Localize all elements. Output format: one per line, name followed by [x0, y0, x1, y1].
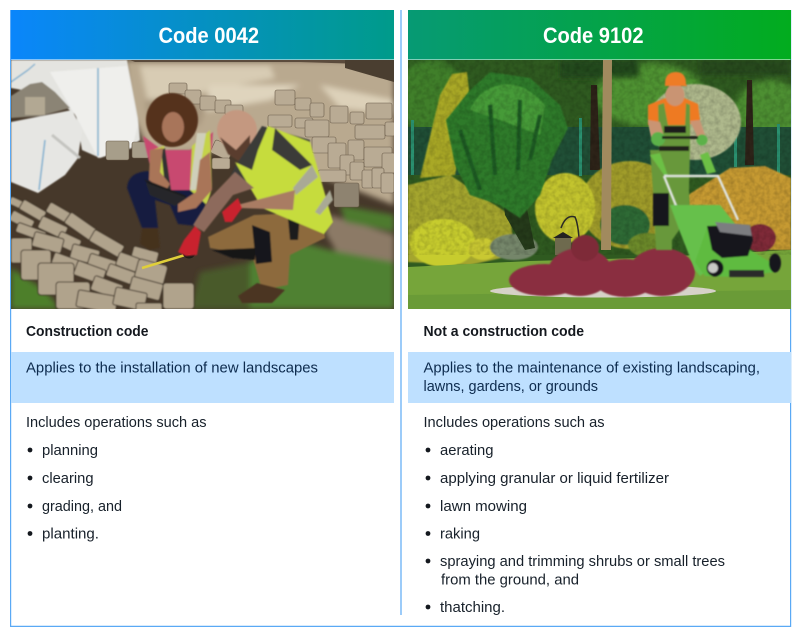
support pole: [601, 60, 612, 250]
list: operations for code 0042: clearing: [42, 471, 94, 487]
band: applies to maintenance: [408, 352, 791, 403]
list: operations for code 0042: [26, 415, 206, 542]
man in safety vest: [178, 110, 333, 303]
list: operations for code 9102: raking: [440, 526, 480, 542]
band: applies to installation: [11, 352, 394, 403]
list: operations for code 9102: [424, 415, 725, 616]
heading: code 0042: Code 0042: [158, 23, 259, 48]
lantern: [553, 216, 580, 255]
tape measure: [142, 254, 194, 270]
panel: code 9102: [395, 10, 800, 616]
lawn: [408, 250, 791, 309]
list: operations for code 9102: Includes operations such as: [424, 415, 604, 431]
lawn mower: [650, 152, 781, 277]
heading: code 9102: Code 9102: [543, 23, 644, 48]
list: operations for code 9102: spraying and trimming shrubs or small trees: [440, 554, 725, 570]
heading: code 9102: [408, 10, 791, 60]
white flowering shrub: [649, 84, 741, 160]
fence and trunks: [408, 80, 791, 176]
band: applies to installation: Applies to the installation of new landscapes: [26, 360, 318, 376]
woman in safety vest: [127, 93, 213, 250]
photo: gardener mowing a lawn: [395, 60, 800, 309]
upper stones: [106, 83, 395, 207]
stone ring: [490, 286, 716, 298]
list: operations for code 9102: thatching.: [440, 600, 505, 616]
list: operations for code 9102: from the ground, and: [441, 572, 579, 588]
list: operations for code 9102: aerating: [440, 443, 494, 459]
list: operations for code 0042: Includes operations such as: [26, 415, 206, 431]
label: not a construction code: Not a construction code: [424, 324, 584, 340]
gardener: [648, 72, 708, 250]
photo: two workers laying paving stones: [8, 60, 395, 313]
list: operations for code 0042: grading, and: [42, 499, 122, 515]
garden shrubs: [408, 72, 791, 267]
label: construction code: Construction code: [26, 324, 148, 340]
heading: code 0042: [11, 10, 394, 60]
bulk bags: [11, 60, 140, 193]
weeping tree: [446, 72, 568, 250]
list: operations for code 0042: planning: [42, 443, 98, 459]
front paving stones: [8, 196, 194, 313]
band: applies to maintenance: Applies to the maintenance of existing landscaping,: [424, 360, 760, 376]
list: operations for code 9102: applying granular or liquid fertilizer: [440, 471, 669, 487]
list: operations for code 0042: planting.: [42, 526, 99, 542]
list: operations for code 9102: lawn mowing: [440, 499, 527, 515]
panel: code 0042: [8, 10, 395, 542]
band: applies to maintenance: lawns, gardens, or grounds: [424, 379, 598, 395]
red barberry shrub: [509, 235, 695, 297]
foliage texture: [408, 60, 791, 255]
